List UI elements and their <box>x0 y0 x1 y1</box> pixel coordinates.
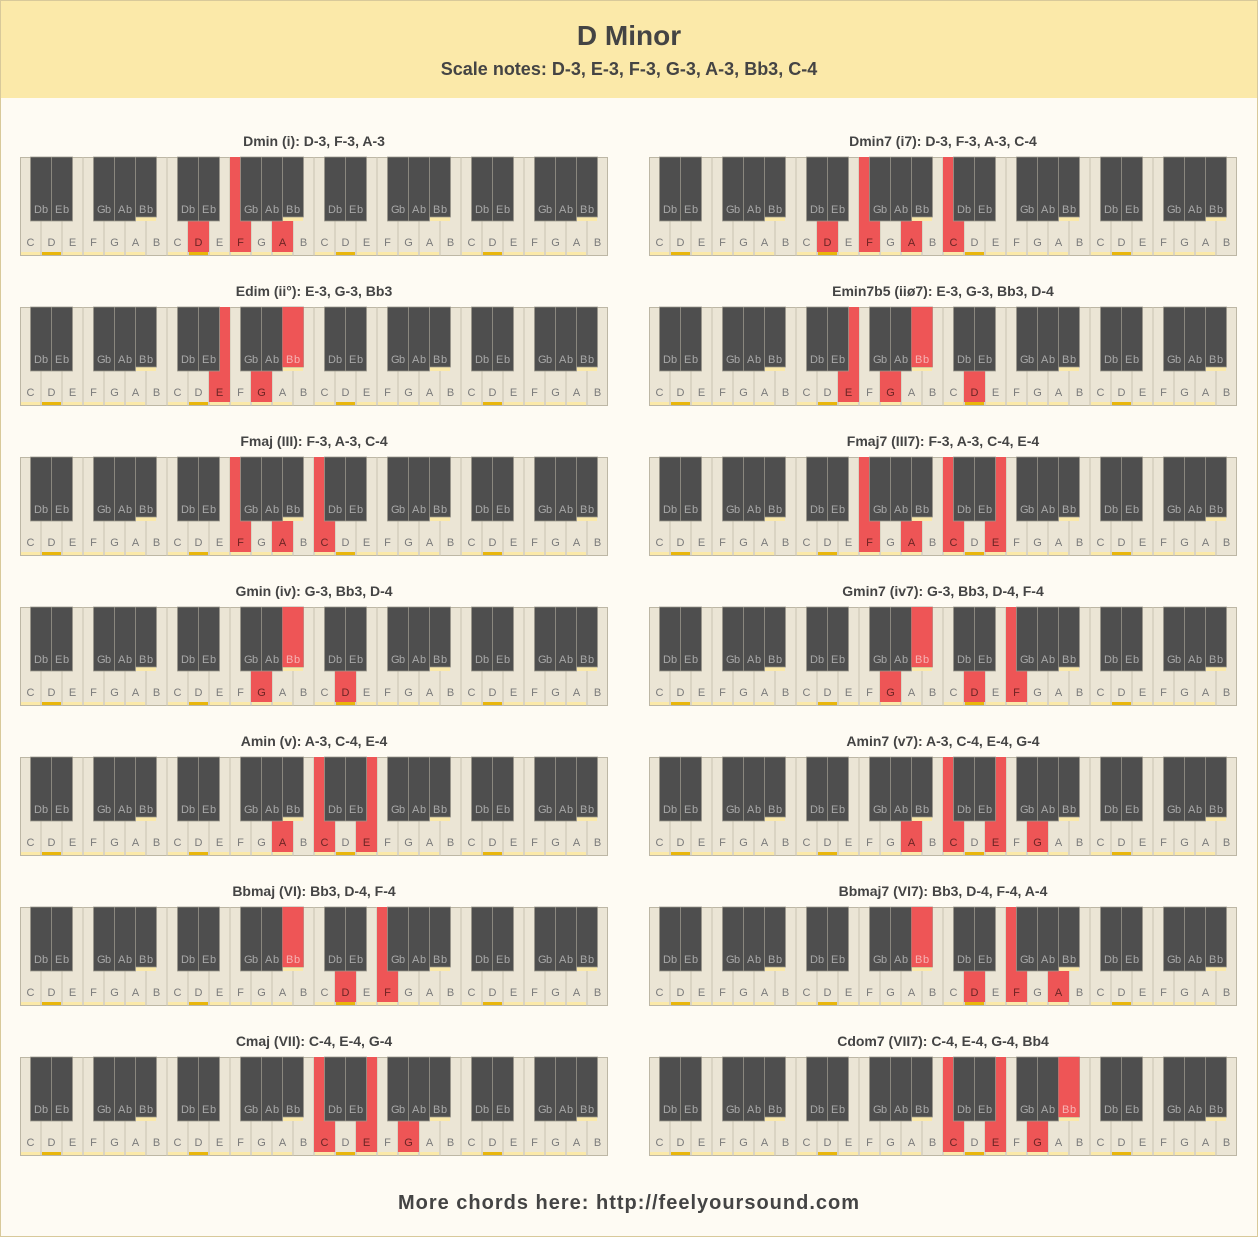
keyboard: Gmin: Bb <box>286 654 300 666</box>
keyboard: Fmaj: FAC <box>237 537 329 549</box>
keyboard: Gmin: GD <box>257 687 350 699</box>
keyboard: Cdom7: Bb <box>1062 1104 1076 1116</box>
keyboard: Fmaj7: DbEbGbAbBbDbEbGbAbBbDbEbGbAbBbDbEbGbAbBb <box>663 504 1223 516</box>
header band <box>1 1 1257 98</box>
keyboard: Bbmaj7: CDEFGABCDEFGABCDEFGABCDEFGAB <box>656 987 1230 999</box>
keyboard: Amin7: DbEbGbAbBbDbEbGbAbBbDbEbGbAbBbDbEbGbAbBb <box>663 804 1223 816</box>
keyboard: Edim: CDEFGABCDEFGABCDEFGABCDEFGAB <box>27 387 601 399</box>
keyboard: Amin7: CDEFGABCDEFGABCDEFGABCDEFGAB <box>656 837 1230 849</box>
chord title: Amin: Amin (v): A-3, C-4, E-4 <box>241 733 387 749</box>
chord title: Cmaj: Cmaj (VII): C-4, E-4, G-4 <box>236 1033 392 1049</box>
keyboard: Edim <box>20 307 608 406</box>
keyboard: Fmaj7 <box>650 457 1236 556</box>
keyboard: Dmin: DFA <box>195 237 287 249</box>
keyboard: Gmin7: CDEFGABCDEFGABCDEFGABCDEFGAB <box>656 687 1230 699</box>
chord title: Bbmaj: Bbmaj (VI): Bb3, D-4, F-4 <box>232 883 396 899</box>
keyboard: Dmin: DbEbGbAbBbDbEbGbAbBbDbEbGbAbBbDbEbGbAbBb <box>34 204 594 216</box>
chord title: Cdom7: Cdom7 (VII7): C-4, E-4, G-4, Bb4 <box>837 1033 1049 1049</box>
keyboard: Amin: DbEbGbAbBbDbEbGbAbBbDbEbGbAbBbDbEbGbAbBb <box>34 804 594 816</box>
chord title: Edim: Edim (ii°): E-3, G-3, Bb3 <box>236 283 392 299</box>
keyboard: Amin7: ACEG <box>908 837 1042 849</box>
keyboard: Emin7b5: Bb <box>915 354 929 366</box>
keyboard: Amin7 <box>650 757 1236 856</box>
keyboard: Bbmaj: DbEbGbAbBbDbEbGbAbDbEbGbAbBbDbEbGbAbBb <box>34 954 594 966</box>
keyboard: Dmin7: DbEbGbAbBbDbEbGbAbBbDbEbGbAbBbDbEbGbAbBb <box>663 204 1223 216</box>
keyboard: Fmaj7: FACE <box>866 537 999 549</box>
keyboard: Cdom7: CEG <box>950 1137 1042 1149</box>
keyboard: Gmin: DbEbGbAbBbDbEbGbAbDbEbGbAbBbDbEbGbAbBb <box>34 654 594 666</box>
keyboard: Emin7b5: CDEFGABCDEFGABCDEFGABCDEFGAB <box>656 387 1230 399</box>
keyboard: Emin7b5 <box>650 307 1236 406</box>
chord title: Gmin7: Gmin7 (iv7): G-3, Bb3, D-4, F-4 <box>842 583 1044 599</box>
chord title: Amin7: Amin7 (v7): A-3, C-4, E-4, G-4 <box>846 733 1040 749</box>
keyboard: Fmaj: DbEbGbAbBbDbEbGbAbBbDbEbGbAbBbDbEbGbAbBb <box>34 504 594 516</box>
keyboard: Cdom7: DbEbGbAbBbDbEbGbAbBbDbEbGbAbDbEbGbAbBb <box>663 1104 1223 1116</box>
keyboard: Bbmaj7: DbEbGbAbBbDbEbGbAbDbEbGbAbBbDbEbGbAbBb <box>663 954 1223 966</box>
keyboard: Cmaj: CEG <box>321 1137 413 1149</box>
keyboard: Cmaj: CDEFGABCDEFGABCDEFGABCDEFGAB <box>27 1137 601 1149</box>
keyboard: Gmin7 <box>650 607 1236 706</box>
keyboard: Gmin7: Bb <box>915 654 929 666</box>
keyboard: Fmaj7: CDEFGABCDEFGABCDEFGABCDEFGAB <box>656 537 1230 549</box>
keyboard: Amin <box>20 757 608 856</box>
keyboard: Dmin <box>20 157 608 256</box>
keyboard: Cmaj: DbEbGbAbBbDbEbGbAbBbDbEbGbAbBbDbEbGbAbBb <box>34 1104 594 1116</box>
chord title: Fmaj7: Fmaj7 (III7): F-3, A-3, C-4, E-4 <box>847 433 1039 449</box>
keyboard: Dmin7: DFAC <box>824 237 958 249</box>
keyboard: Bbmaj7 <box>650 907 1236 1006</box>
keyboard: Bbmaj7: Bb <box>915 954 929 966</box>
keyboard: Gmin7: GDF <box>886 687 1020 699</box>
keyboard: Edim: DbEbGbAbBbDbEbGbAbDbEbGbAbBbDbEbGbAbBb <box>34 354 594 366</box>
keyboard: Bbmaj <box>20 907 608 1006</box>
keyboard: Gmin: CDEFGABCDEFGABCDEFGABCDEFGAB <box>27 687 601 699</box>
keyboard: Gmin7: DbEbGbAbBbDbEbGbAbDbEbGbAbBbDbEbGbAbBb <box>663 654 1223 666</box>
chord title: Dmin7: Dmin7 (i7): D-3, F-3, A-3, C-4 <box>849 133 1037 149</box>
keyboard: Bbmaj: Bb <box>286 954 300 966</box>
chord title: Dmin: Dmin (i): D-3, F-3, A-3 <box>243 133 385 149</box>
keyboard: Amin: CDEFGABCDEFGABCDEFGABCDEFGAB <box>27 837 601 849</box>
keyboard: Emin7b5: DbEbGbAbBbDbEbGbAbDbEbGbAbBbDbEbGbAbBb <box>663 354 1223 366</box>
keyboard: Bbmaj: CDEFGABCDEFGABCDEFGABCDEFGAB <box>27 987 601 999</box>
title: D Minor <box>577 20 681 51</box>
chord title: Fmaj: Fmaj (III): F-3, A-3, C-4 <box>240 433 388 449</box>
chord title: Emin7b5: Emin7b5 (iiø7): E-3, G-3, Bb3, D-4 <box>832 283 1054 299</box>
keyboard: Fmaj: CDEFGABCDEFGABCDEFGABCDEFGAB <box>27 537 601 549</box>
chord title: Gmin: Gmin (iv): G-3, Bb3, D-4 <box>235 583 393 599</box>
keyboard: Bbmaj7: DFA <box>971 987 1063 999</box>
keyboard: Dmin7: CDEFGABCDEFGABCDEFGABCDEFGAB <box>656 237 1230 249</box>
keyboard: Edim: Bb <box>286 354 300 366</box>
keyboard: Edim: EG <box>216 387 266 399</box>
keyboard: Dmin7 <box>650 157 1236 256</box>
keyboard: Cmaj <box>20 1057 608 1156</box>
keyboard: Dmin: CDEFGABCDEFGABCDEFGABCDEFGAB <box>27 237 601 249</box>
keyboard: Emin7b5: EGD <box>845 387 979 399</box>
keyboard: Bbmaj: DF <box>342 987 391 999</box>
footer: More chords here: http://feelyoursound.com <box>398 1192 860 1214</box>
chord title: Bbmaj7: Bbmaj7 (VI7): Bb3, D-4, F-4, A-4 <box>839 883 1048 899</box>
keyboard: Fmaj <box>20 457 608 556</box>
keyboard: Cdom7: CDEFGABCDEFGABCDEFGABCDEFGAB <box>656 1137 1230 1149</box>
keyboard: Gmin <box>20 607 608 706</box>
keyboard: Amin: ACE <box>279 837 370 849</box>
keyboard: Cdom7 <box>650 1057 1236 1156</box>
subtitle: Scale notes: D-3, E-3, F-3, G-3, A-3, Bb3, C-4 <box>441 59 817 79</box>
